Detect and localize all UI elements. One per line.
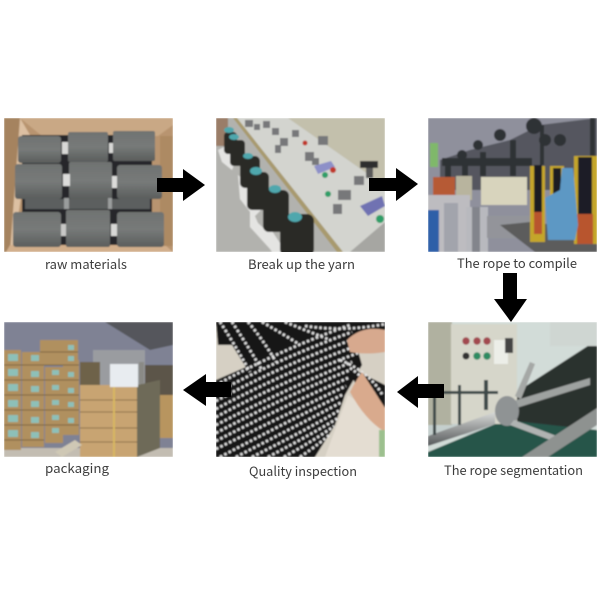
label: the rope segmentation: The rope segmentation xyxy=(444,460,583,479)
photo: raw materials xyxy=(4,118,173,252)
arrow: rope compile to segmentation xyxy=(494,273,527,322)
label: break up the yarn: Break up the yarn xyxy=(248,254,355,273)
photo: quality inspection xyxy=(216,322,385,457)
label: raw materials: raw materials xyxy=(45,254,127,273)
label: quality inspection: Quality inspection xyxy=(249,461,357,480)
label: the rope to compile: The rope to compile xyxy=(457,253,577,272)
arrow: break up the yarn to rope compile xyxy=(369,168,418,201)
photo: rope compiling machines xyxy=(428,118,597,252)
photo: packaging warehouse xyxy=(4,322,173,457)
arrow: segmentation to quality inspection xyxy=(397,376,444,408)
arrow: quality inspection to packaging xyxy=(183,374,231,406)
photo: rope segmentation machine xyxy=(428,322,597,457)
label: packaging: packaging xyxy=(45,458,110,477)
arrow: raw materials to break up the yarn xyxy=(157,169,205,201)
photo: break up the yarn xyxy=(216,118,385,256)
